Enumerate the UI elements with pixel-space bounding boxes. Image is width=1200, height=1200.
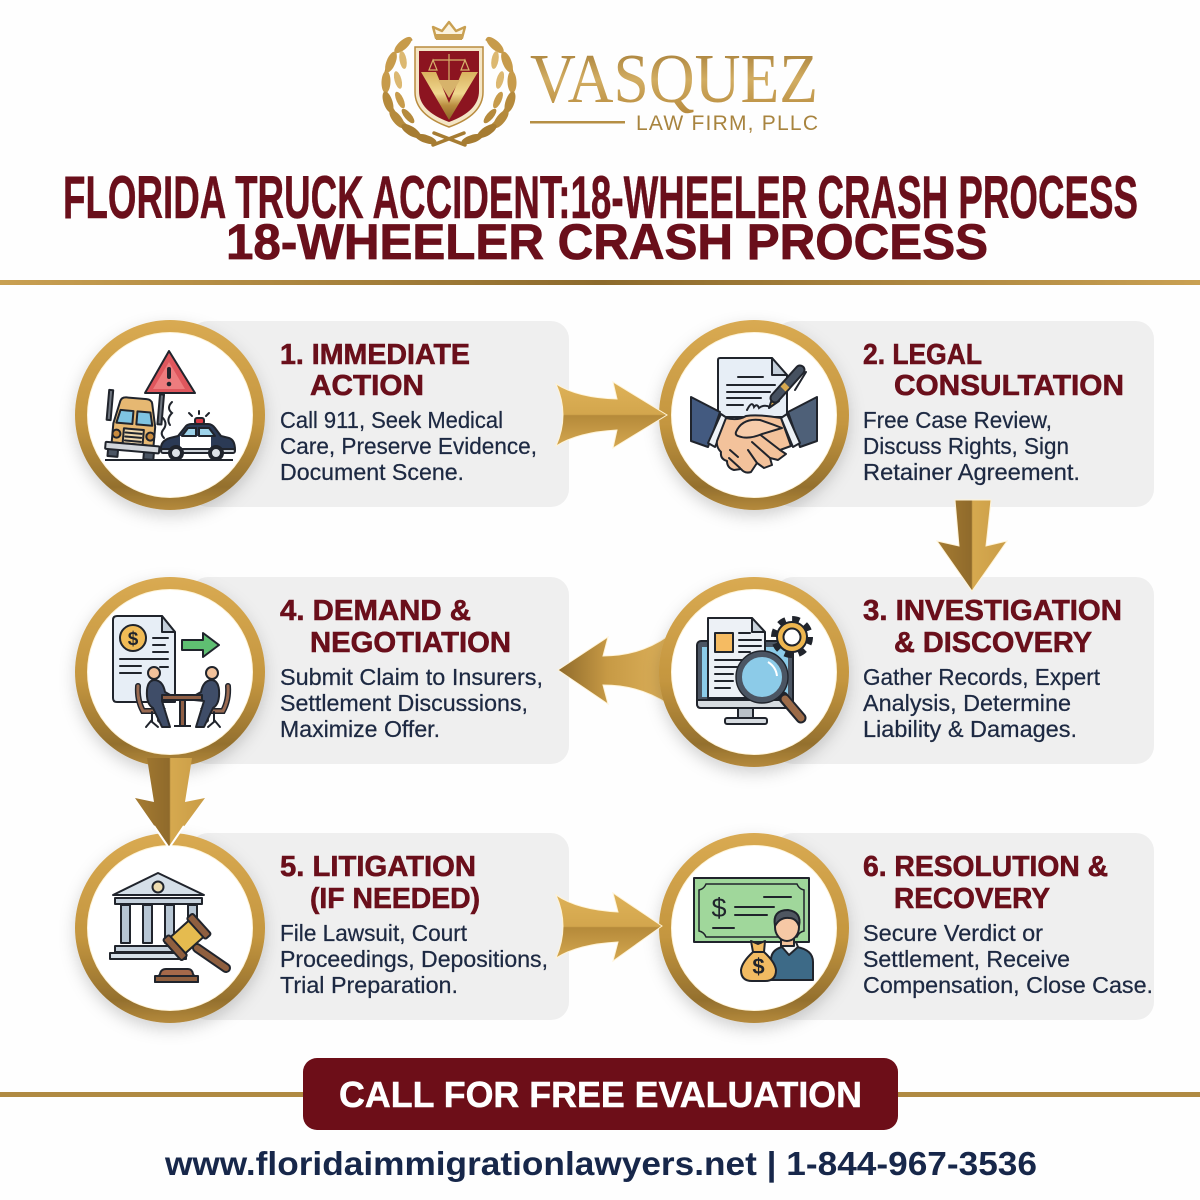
step 5 body: Trial Preparation.: [280, 972, 458, 998]
step 3 text: [863, 595, 1122, 742]
icon: gear: [775, 620, 809, 654]
icon: magnifying glass: [736, 651, 801, 718]
icon: warning triangle: [145, 351, 195, 393]
white disc: [88, 590, 252, 754]
step 1 body: Call 911, Seek Medical: [280, 407, 503, 433]
gold ring: [659, 833, 849, 1023]
step 4 text: [280, 595, 543, 742]
step 3 body: Liability & Damages.: [863, 716, 1077, 742]
panel: step 6 card: [775, 833, 1154, 1020]
white disc: [672, 332, 836, 498]
icon: shield: [415, 47, 483, 127]
step 2 heading: 2. LEGAL: [863, 339, 982, 371]
panel: step 5 card: [190, 833, 569, 1020]
step 3 heading: 3. INVESTIGATION: [863, 595, 1122, 627]
step 5 body: Proceedings, Depositions,: [280, 946, 548, 972]
panel: step 4 card: [190, 577, 569, 764]
step 2 body: Retainer Agreement.: [863, 459, 1080, 485]
step 1 body: Document Scene.: [280, 459, 464, 485]
step 3 body: Analysis, Determine: [863, 690, 1071, 716]
step 4 badge: [75, 577, 265, 767]
ground line: [105, 459, 233, 461]
icon: police car: [161, 411, 235, 459]
firm name: VASQUEZ: [530, 41, 818, 118]
step 3 body: Gather Records, Expert: [863, 664, 1101, 690]
white disc: [672, 846, 836, 1010]
white disc: [672, 590, 836, 754]
icon: crown: [433, 22, 465, 40]
icon: claim document: $: [128, 629, 139, 650]
icon: report page: [708, 618, 765, 698]
step 2 body: Discuss Rights, Sign: [863, 433, 1069, 459]
icon: settlement check: [694, 878, 809, 942]
step 6 text: [863, 851, 1153, 998]
arrow: step 4 to step 5: [135, 758, 205, 847]
panel: step 2 card: [775, 321, 1154, 507]
step 5 heading: (IF NEEDED): [310, 883, 480, 915]
step 1 heading: 1. IMMEDIATE: [280, 339, 470, 371]
step 5 badge: [75, 833, 265, 1023]
step 6 heading: 6. RESOLUTION &: [863, 851, 1108, 883]
icon: gavel: [155, 913, 226, 982]
call to action button: [303, 1058, 898, 1130]
icon: claim document: [113, 616, 175, 702]
step 2 heading: CONSULTATION: [894, 370, 1124, 402]
icon: money bag: [741, 941, 776, 981]
step 6 body: Compensation, Close Case.: [863, 972, 1153, 998]
step 1 badge: [75, 320, 265, 510]
step 4 body: Settlement Discussions,: [280, 690, 528, 716]
step 3 heading: & DISCOVERY: [894, 627, 1092, 659]
step 6 heading: RECOVERY: [894, 883, 1050, 915]
step 5 text: [280, 851, 548, 998]
panel: step 3 card: [775, 577, 1154, 764]
icon: pen: [769, 370, 806, 408]
step 6 body: Secure Verdict or: [863, 920, 1043, 946]
icon: signed document: [718, 358, 787, 417]
step 1 body: Care, Preserve Evidence,: [280, 433, 537, 459]
contact line: www.floridaimmigrationlawyers.net | 1-844-967-3536: [164, 1145, 1037, 1182]
icon: money bag: $: [752, 954, 765, 979]
icon: handshake: [691, 397, 817, 473]
logo rule: [530, 121, 625, 124]
arrow: step 5 to step 6: [556, 893, 662, 961]
firm subtitle: LAW FIRM, PLLC: [636, 112, 818, 135]
button background: [303, 1058, 898, 1130]
icon: crashed truck: [103, 390, 164, 460]
step 3 badge: [659, 577, 849, 767]
title: [63, 164, 1138, 270]
gold ring: [75, 320, 265, 510]
gold ring: [75, 833, 265, 1023]
gold ring: [659, 320, 849, 510]
step 2 body: Free Case Review,: [863, 407, 1052, 433]
step 4 body: Submit Claim to Insurers,: [280, 664, 543, 690]
icon: monitor: [697, 641, 793, 724]
icon: settlement check: $: [711, 893, 727, 923]
icon: smoke: [162, 402, 172, 438]
icon: negotiating people: [138, 667, 228, 727]
step 1 text: [280, 339, 537, 485]
gold ring: [75, 577, 265, 767]
logo: [380, 22, 818, 146]
step 6 body: Settlement, Receive: [863, 946, 1070, 972]
step 5 body: File Lawsuit, Court: [280, 920, 468, 946]
step 4 heading: NEGOTIATION: [310, 627, 511, 659]
step 2 badge: [659, 320, 849, 510]
step 4 body: Maximize Offer.: [280, 716, 440, 742]
arrow: step 3 to step 4: [558, 636, 668, 704]
arrow: step 1 to step 2: [556, 382, 667, 448]
arrow: step 2 to step 3: [937, 500, 1007, 591]
step 5 heading: 5. LITIGATION: [280, 851, 476, 883]
step 4 heading: 4. DEMAND &: [280, 595, 471, 627]
panel: step 1 card: [190, 321, 569, 507]
white disc: [88, 332, 252, 498]
icon: laurel wreath: [380, 34, 518, 146]
white disc: [88, 846, 252, 1010]
icon: green arrow: [182, 633, 219, 657]
gold ring: [659, 577, 849, 767]
icon: courthouse: [110, 873, 204, 959]
button label: CALL FOR FREE EVALUATION: [339, 1074, 862, 1115]
step 6 badge: [659, 833, 849, 1023]
step 1 heading: ACTION: [310, 370, 424, 402]
step 2 text: [863, 339, 1124, 485]
icon: person: [771, 910, 813, 980]
title line 2: 18-WHEELER CRASH PROCESS: [226, 214, 988, 270]
